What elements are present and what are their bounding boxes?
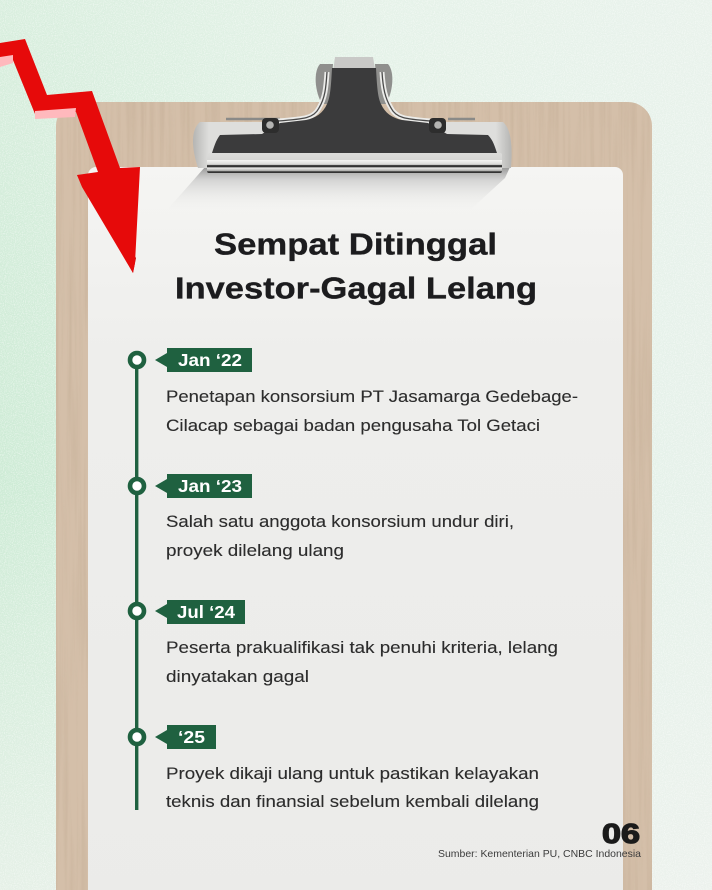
timeline line <box>135 360 138 810</box>
entry: 25: teknis dan finansial sebelum kembali dilelang <box>166 792 539 811</box>
entry: Jul 24 <box>130 600 558 686</box>
entry: Jan 23: Jan ‘23 <box>178 476 242 496</box>
entry: Jul 24: Peserta prakualifikasi tak penuhi kriteria, lelang <box>166 638 558 657</box>
red downward arrow <box>0 39 140 273</box>
metal clip <box>193 57 512 173</box>
entry: 25: Proyek dikaji ulang untuk pastikan kelayakan <box>166 764 539 783</box>
clipboard board <box>56 102 652 890</box>
entry: Jul 24: Jul ‘24 <box>177 602 235 622</box>
entry: 25: ‘25 <box>178 727 205 747</box>
paper sheet <box>88 167 623 890</box>
entry: Jul 24: dinyatakan gagal <box>166 667 309 686</box>
clip screws <box>262 118 279 133</box>
clip shadow on paper <box>167 167 510 210</box>
clip dark plate <box>212 68 497 153</box>
entry: Jan 22 <box>130 348 578 435</box>
entry: Jan 23 <box>130 474 514 560</box>
clip lower bar <box>207 153 502 173</box>
clip top hinge <box>333 57 375 72</box>
entry: Jan 23: Salah satu anggota konsorsium undur diri, <box>166 512 514 531</box>
title: Investor-Gagal Lelang <box>175 272 537 306</box>
entry: Jan 22: Penetapan konsorsium PT Jasamarga Gedebage- <box>166 387 578 406</box>
entry: Jan 22: Cilacap sebagai badan pengusaha Tol Getaci <box>166 416 540 435</box>
page number: 06 <box>602 818 640 849</box>
title <box>175 228 537 306</box>
entry: Jan 22: Jan ‘22 <box>178 350 242 370</box>
title: Sempat Ditinggal <box>214 228 497 262</box>
timeline <box>130 348 578 811</box>
clip springs <box>226 118 475 120</box>
entry: Jan 23: proyek dilelang ulang <box>166 541 344 560</box>
entry: 25 <box>130 725 539 811</box>
source note: Sumber: Kementerian PU, CNBC Indonesia <box>438 848 641 860</box>
clip silver base <box>193 122 512 168</box>
